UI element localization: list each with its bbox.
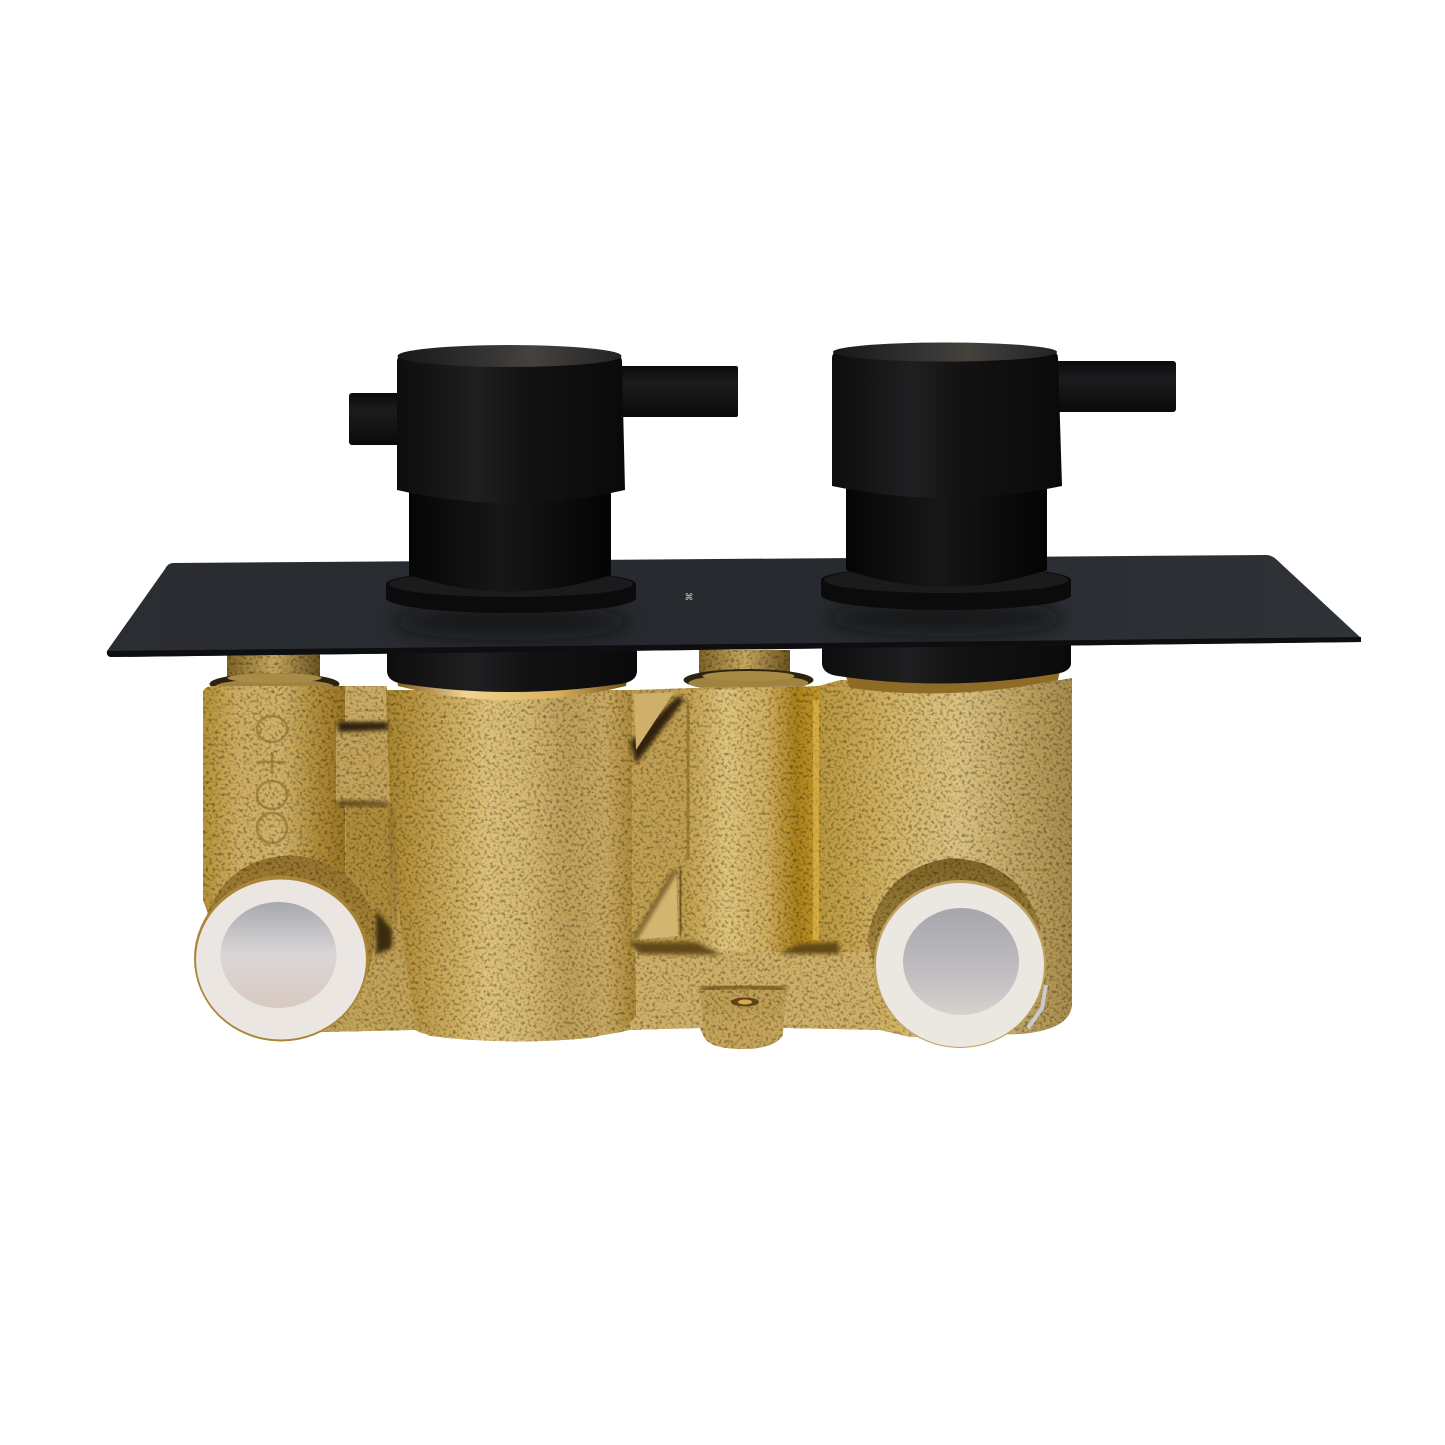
left pipe inlet: [194, 855, 392, 1042]
left flange: [386, 570, 636, 613]
central base bar: [630, 952, 880, 1030]
large left valve cylinder: [386, 690, 636, 1042]
base left foot: [323, 960, 415, 1032]
right valve cylinder: [818, 678, 1072, 1037]
right white sleeve: [874, 880, 1046, 1048]
right lever: [1050, 361, 1176, 412]
body silhouette: [203, 678, 1072, 1049]
mounting lug: [700, 987, 786, 1049]
plate logo mark: ⌘: [684, 592, 694, 602]
left short lever: [349, 393, 401, 445]
rib block middle: [336, 726, 390, 802]
left long lever: [620, 366, 738, 417]
left black handle: [349, 345, 738, 613]
right pipe bore: [903, 908, 1019, 1015]
product photo: black and brass shower valve: [106, 342, 1361, 1049]
brass valve body: [203, 678, 1072, 1049]
right lower stem: [846, 486, 1047, 587]
right knob top: [833, 342, 1057, 362]
brass nut left: [210, 652, 340, 695]
rib strip lower: [346, 804, 392, 939]
right flange: [821, 566, 1071, 610]
middle web: [632, 688, 690, 952]
left knob body: [397, 352, 625, 503]
left cold-water cylinder: [203, 686, 345, 1030]
lug top face: [698, 987, 788, 1014]
casting shadows: [338, 692, 840, 1006]
plate shadows under flanges: [393, 600, 1064, 640]
left brass collar: [205, 855, 375, 1000]
brass nut right: [684, 650, 814, 691]
right pipe inlet: [867, 858, 1046, 1048]
left knob top: [398, 345, 622, 367]
left lower black sleeve: [387, 645, 637, 700]
left lower stem: [409, 490, 611, 592]
right black handle: [821, 342, 1176, 610]
black wall plate: [107, 555, 1361, 657]
embossed COLD lettering: [257, 716, 287, 843]
valve assembly: [107, 342, 1361, 1049]
right lower black sleeve: [822, 642, 1071, 693]
right brass collar: [867, 858, 1040, 990]
left white sleeve: [194, 876, 368, 1042]
right knob body: [832, 349, 1062, 498]
left pipe bore: [220, 902, 336, 1008]
middle vertical cylinder: [686, 686, 820, 952]
rib block upper: [345, 686, 387, 722]
